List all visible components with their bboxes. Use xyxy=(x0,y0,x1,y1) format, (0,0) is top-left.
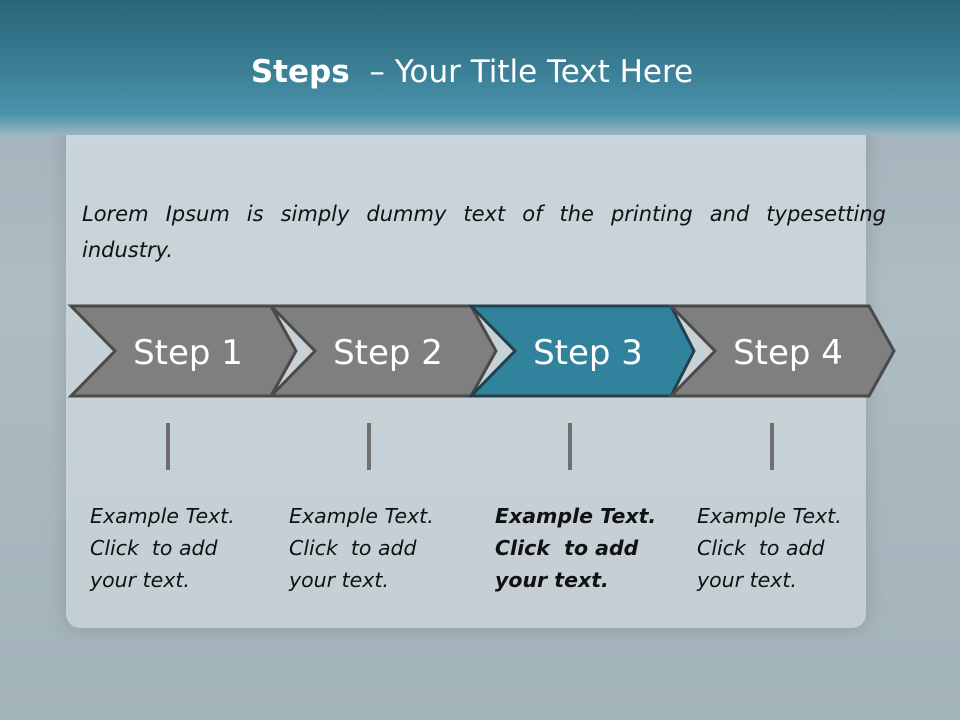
text 3: Example Text. xyxy=(495,504,656,528)
step 1 xyxy=(71,306,296,396)
step 2: Step 2 xyxy=(333,333,443,373)
text 3 xyxy=(495,504,656,592)
text 2: Example Text. xyxy=(289,504,434,528)
text 1 xyxy=(90,504,235,592)
text 4 xyxy=(696,504,842,592)
header band xyxy=(0,0,960,135)
step 3 xyxy=(471,306,694,396)
text 2: Click to add xyxy=(289,536,417,560)
step 3: Step 3 xyxy=(533,333,643,373)
text 1: your text. xyxy=(90,568,190,592)
step 4 xyxy=(671,306,894,396)
intro text xyxy=(82,202,886,262)
text 1: Click to add xyxy=(90,536,218,560)
text 3: Click to add xyxy=(495,536,638,560)
text 3: your text. xyxy=(495,568,609,592)
intro text: Lorem Ipsum is simply dummy text of the printing and typesetting xyxy=(82,202,886,226)
step 2 xyxy=(271,306,496,396)
text 1: Example Text. xyxy=(90,504,235,528)
text 2: your text. xyxy=(289,568,389,592)
text 4: your text. xyxy=(697,568,797,592)
text 2 xyxy=(288,504,434,592)
connector lines xyxy=(166,423,774,470)
background board xyxy=(66,120,866,628)
intro text: industry. xyxy=(82,238,173,262)
title: Steps – Your Title Text Here xyxy=(251,54,693,90)
step 1: Step 1 xyxy=(133,333,243,373)
step 4: Step 4 xyxy=(733,333,843,373)
text 4: Click to add xyxy=(697,536,825,560)
text 4: Example Text. xyxy=(697,504,842,528)
